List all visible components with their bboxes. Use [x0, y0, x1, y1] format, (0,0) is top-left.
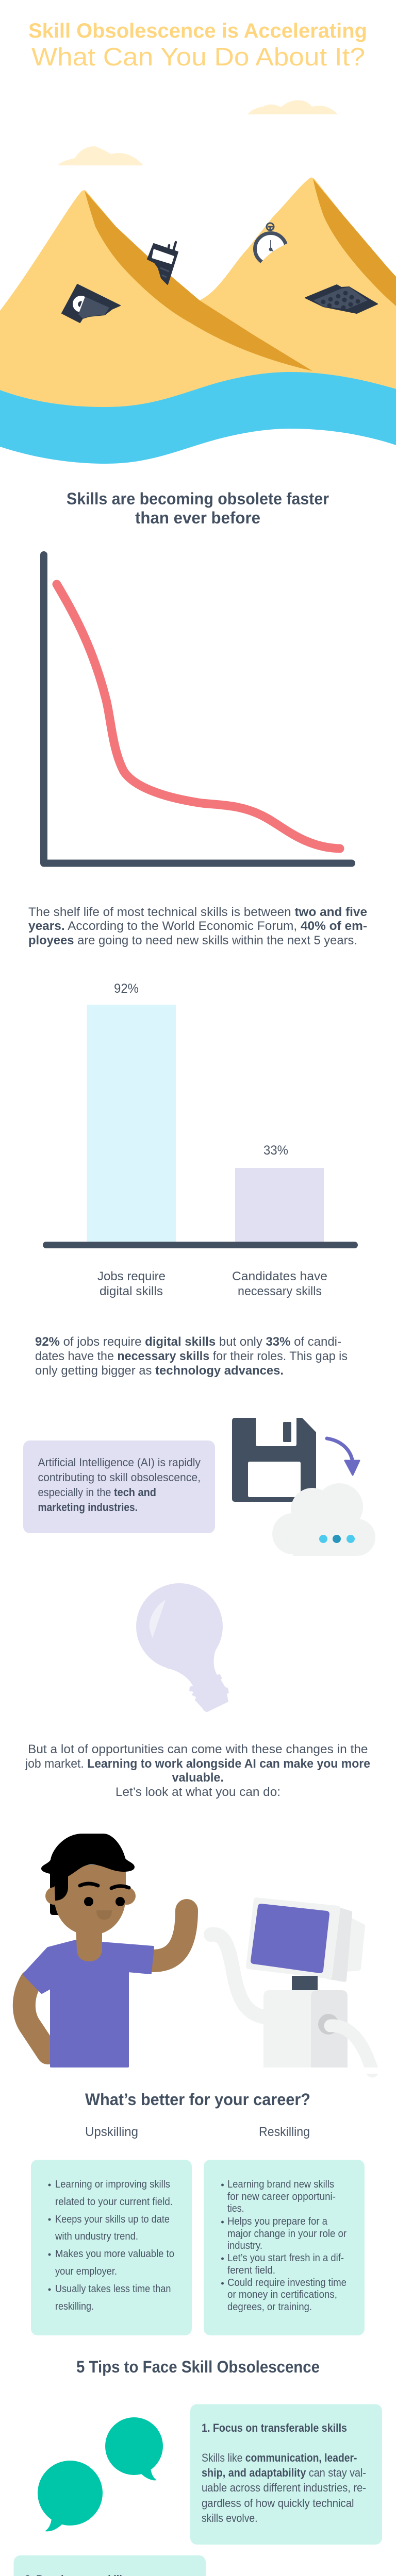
- heading: what's better: What’s better for your career?: [85, 2090, 310, 2109]
- panel: reskilling: for new career opportuni-: [227, 2191, 336, 2202]
- panel: AI callout: contributing to skill obsolescence,: [38, 1471, 201, 1484]
- text line: new skills: ployees are going to need new skills within the next 5 years.: [28, 934, 357, 947]
- panel: AI callout: marketing industries.: [38, 1501, 138, 1514]
- raised arm: [153, 1910, 187, 1961]
- chart axes: [44, 555, 352, 863]
- robot head: [249, 1900, 338, 1976]
- panel: AI callout: especially in the tech and: [38, 1486, 156, 1499]
- cloud left: [58, 146, 143, 165]
- text line: world economic forum: years. According to the World Economic Forum, 40% of em-: [28, 919, 367, 933]
- text block: opportunities: valuable.: [172, 1771, 224, 1785]
- label: candidates: Candidates have: [232, 1269, 327, 1283]
- icon: floppy disk to cloud: [232, 1418, 375, 1556]
- icon: cassette: [62, 284, 120, 323]
- cloud: [272, 1483, 375, 1556]
- panel: upskilling: Learning or improving skills: [55, 2179, 170, 2190]
- shirt: [24, 1941, 153, 2066]
- heading: upskilling: Upskilling: [85, 2125, 138, 2139]
- value: 92 percent: 92%: [114, 981, 139, 996]
- label: jobs: digital skills: [100, 1284, 163, 1298]
- face: [54, 1865, 126, 1935]
- eyebrows: [80, 1884, 129, 1888]
- eyes: [84, 1897, 93, 1906]
- panel: upskilling: Keeps your skills up to date: [55, 2214, 170, 2225]
- text block: shelf life: The shelf life of most technical skills is between two and five: [28, 905, 367, 919]
- icon: radio: [147, 242, 178, 284]
- text block: opportunities: [25, 1742, 370, 1799]
- title: [28, 20, 367, 71]
- panel: reskilling: or money in certifications,: [227, 2289, 337, 2300]
- hair: [41, 1834, 135, 1901]
- text block: opportunities: Let’s look at what you can do:: [116, 1785, 280, 1799]
- panel: AI callout: Artificial Intelligence (AI) is rapidly: [38, 1456, 201, 1469]
- illustration: robot: [211, 1900, 396, 2074]
- icon: light bulb: [136, 1583, 229, 1712]
- right dune shadow: [313, 179, 396, 306]
- hero illustration: sand dunes burying old tech: [0, 100, 396, 464]
- label: candidates: [232, 1269, 327, 1298]
- robot back plate: [346, 1921, 362, 1969]
- panel: AI callout: [23, 1440, 215, 1533]
- panel: reskilling: Let’s you start fresh in a dif-: [227, 2252, 344, 2264]
- panel: tip 1: gardless of how quickly technical: [202, 2497, 354, 2510]
- robot left arm: [211, 1935, 271, 2018]
- heading: reskilling: Reskilling: [259, 2125, 310, 2139]
- panel: upskilling: reskilling.: [55, 2301, 94, 2312]
- text block: skills gap: only getting bigger as technology advances.: [35, 1364, 284, 1378]
- panel: tip 1: Skills like communication, leader-: [202, 2451, 357, 2464]
- panel: reskilling: [204, 2160, 365, 2335]
- robot side: [327, 1908, 350, 1980]
- bar: 33 percent: [235, 1168, 324, 1243]
- text block: skills gap: 92% of jobs require digital skills but only 33% of candi-: [35, 1335, 341, 1349]
- panel: reskilling: Learning brand new skills: [227, 2179, 334, 2190]
- panel: upskilling: Usually takes less time than: [55, 2283, 171, 2295]
- hair back: [50, 1870, 64, 1915]
- robot screen: [254, 1907, 326, 1970]
- robot neck: [292, 1976, 318, 1990]
- icon: calculator: [305, 285, 377, 313]
- cloud right: [248, 100, 338, 114]
- text block: skills gap: [35, 1335, 348, 1378]
- panel: upskilling: related to your current field.: [55, 2196, 173, 2208]
- panel: upskilling: your employer.: [55, 2266, 117, 2277]
- value: 33 percent: 33%: [263, 1143, 288, 1158]
- robot body: [263, 1990, 315, 2067]
- illustration: person waving: [24, 1834, 187, 2066]
- heading: 5 tips: 5 Tips to Face Skill Obsolescence: [76, 2358, 320, 2376]
- cloud dots: [319, 1535, 327, 1543]
- title: Skill Obsolescence is Accelerating: [28, 20, 367, 42]
- mouth: [96, 1910, 112, 1920]
- heading: skills becoming obsolete: than ever before: [135, 509, 260, 527]
- text block: skills gap: dates have the necessary skills for their roles. This gap is: [35, 1349, 348, 1363]
- panel: reskilling: ferent field.: [227, 2265, 275, 2276]
- left arm: [24, 1981, 48, 2053]
- panel: reskilling: major change in your role or: [227, 2228, 346, 2240]
- panel: reskilling: ties.: [227, 2203, 244, 2214]
- panel: tip 1: uable across different industries, re-: [202, 2481, 366, 2494]
- left dune shadow: [85, 191, 312, 371]
- curved arrow: [327, 1438, 353, 1462]
- heading: skills becoming obsolete: [67, 489, 329, 527]
- panel: reskilling: Helps you prepare for a: [227, 2216, 328, 2227]
- robot joint: [318, 2014, 339, 2035]
- panel: upskilling: [31, 2160, 192, 2335]
- panel: tip 2: [13, 2555, 206, 2576]
- label: jobs: [97, 1269, 166, 1298]
- panel: tip 1: 1. Focus on transferable skills: [202, 2421, 347, 2434]
- neck: [76, 1927, 102, 1961]
- right dune: [200, 177, 396, 412]
- robot right arm: [331, 2026, 372, 2071]
- heading: skills becoming obsolete: Skills are becoming obsolete faster: [67, 489, 329, 508]
- icon: stopwatch: [255, 223, 287, 265]
- title: What Can You Do About It?: [31, 43, 365, 71]
- panel: reskilling: Could require investing time: [227, 2277, 346, 2289]
- bar chart: digital skills gap: [43, 981, 358, 1298]
- baseline: [43, 1242, 358, 1248]
- declining curve: [57, 584, 340, 849]
- icon: speech bubbles: [38, 2417, 163, 2531]
- panel: tip 1: ship, and adaptability can stay val-: [202, 2466, 366, 2479]
- floppy disk: [232, 1418, 316, 1502]
- panel: tip 1: skills evolve.: [202, 2512, 258, 2524]
- label: candidates: necessary skills: [238, 1284, 322, 1298]
- panel: upskilling: Makes you more valuable to: [55, 2248, 174, 2260]
- panel: upskilling: with undustry trend.: [55, 2231, 138, 2242]
- text block: opportunities: job market. Learning to work alongside AI can make you more: [25, 1757, 370, 1771]
- panel: tip 1: [190, 2404, 382, 2545]
- panel: reskilling: industry.: [227, 2240, 262, 2251]
- text block: opportunities: But a lot of opportunities can come with these changes in the: [28, 1742, 368, 1756]
- left dune: [0, 190, 312, 412]
- panel: reskilling: degrees, or training.: [227, 2301, 312, 2313]
- line chart: skill shelf life declining: [44, 555, 352, 863]
- ears: [45, 1887, 63, 1905]
- bar: 92 percent: [87, 1005, 176, 1243]
- water: [0, 372, 396, 464]
- label: jobs: Jobs require: [97, 1269, 166, 1283]
